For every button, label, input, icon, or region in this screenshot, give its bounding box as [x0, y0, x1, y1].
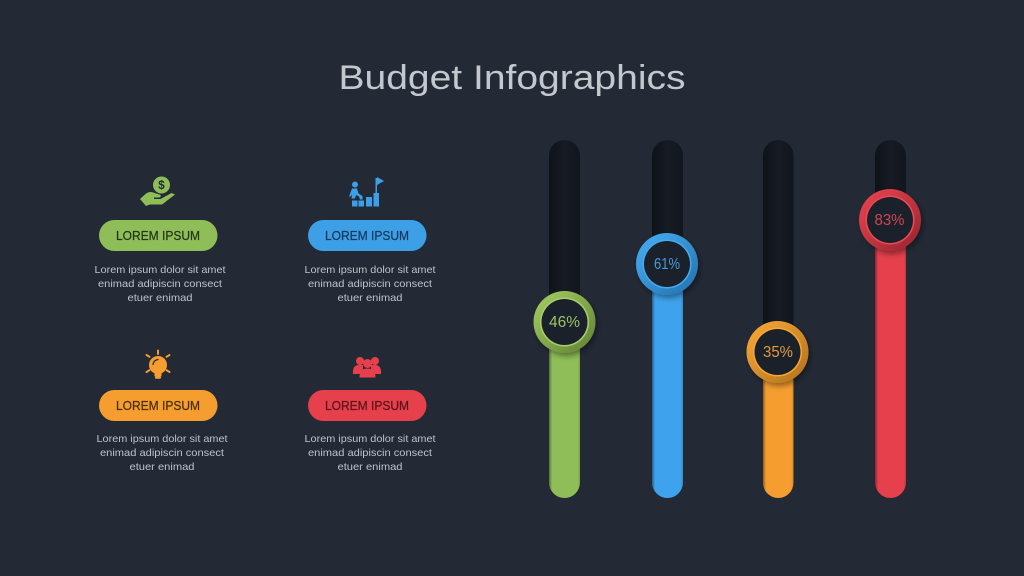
text block: etuer enimad [130, 462, 195, 473]
pill: lorem ipsum green: LOREM IPSUM [116, 228, 200, 243]
panel: blue item [304, 177, 436, 304]
text block: Lorem ipsum dolor sit amet [304, 434, 436, 445]
text block: enimad adipiscin consect [308, 448, 432, 459]
text block: etuer enimad [338, 462, 403, 473]
icon: climber on stairs with flag [349, 177, 384, 206]
panel: green item [94, 176, 226, 304]
slider chart: blue 61% [636, 140, 698, 498]
slider chart: green 46% [534, 140, 596, 498]
icon: hand holding coin: $ [158, 180, 165, 192]
text block [96, 434, 228, 473]
pill: lorem ipsum red: LOREM IPSUM [325, 398, 409, 413]
slider chart: red 83%: 83% [874, 212, 905, 229]
slider chart: blue 61%: 61% [654, 256, 680, 273]
text block [94, 265, 226, 304]
text block: Lorem ipsum dolor sit amet [96, 434, 228, 445]
panel: orange item [96, 350, 228, 473]
text block: enimad adipiscin consect [308, 279, 432, 290]
pill: lorem ipsum orange: LOREM IPSUM [116, 398, 200, 413]
text block: etuer enimad [128, 293, 193, 304]
text block: enimad adipiscin consect [98, 279, 222, 290]
icon: group of people [353, 357, 381, 378]
title: Budget Infographics [338, 59, 686, 97]
text block: Lorem ipsum dolor sit amet [94, 265, 226, 276]
pill: lorem ipsum blue: LOREM IPSUM [325, 228, 409, 243]
text block: etuer enimad [338, 293, 403, 304]
slider chart: orange 35%: 35% [763, 344, 793, 361]
slider chart: red 83% [859, 140, 921, 498]
slider chart: green 46%: 46% [549, 314, 580, 331]
text block: Lorem ipsum dolor sit amet [304, 265, 436, 276]
text block [304, 265, 436, 304]
panel: red item [304, 357, 436, 473]
text block: enimad adipiscin consect [100, 448, 224, 459]
icon: light bulb [146, 350, 170, 379]
text block [304, 434, 436, 473]
slider chart: orange 35% [746, 140, 808, 498]
